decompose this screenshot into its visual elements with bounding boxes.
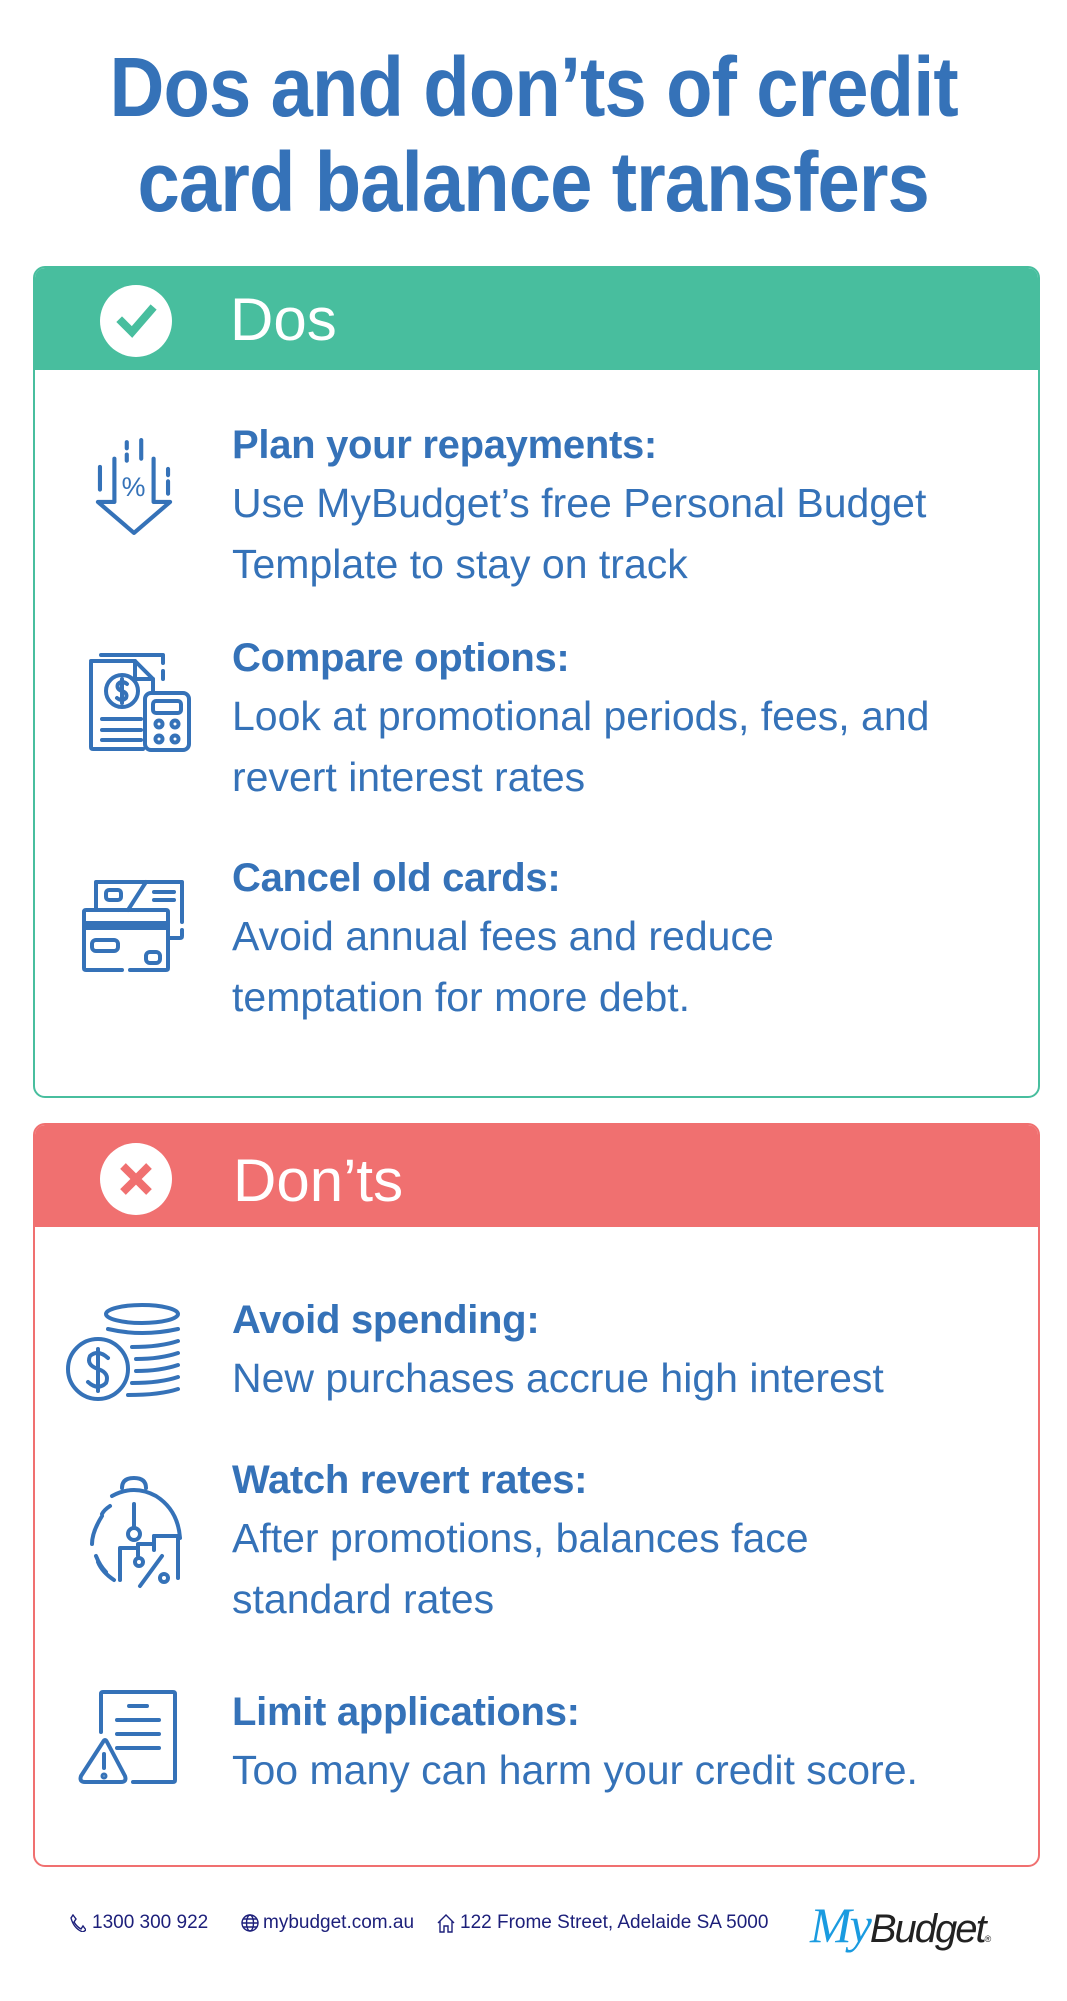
item: watch revert rates [232, 1458, 809, 1622]
icon: percent down arrow [96, 438, 172, 535]
item: compare options: Look at promotional periods, fees, and [232, 693, 929, 739]
phone number: 1300 300 922 [92, 1912, 208, 1933]
item: plan repayments: Plan your repayments: [232, 423, 657, 467]
icon: stopwatch percent [90, 1476, 182, 1588]
item: plan repayments [232, 423, 926, 587]
title: Dos and don’ts of credit [109, 40, 958, 134]
item: cancel old cards: Avoid annual fees and reduce [232, 913, 774, 959]
dos header [35, 268, 1038, 370]
icon: phone [70, 1914, 86, 1932]
icon: coins [66, 1303, 180, 1401]
item: compare options: revert interest rates [232, 754, 585, 800]
dos heading: Dos [230, 286, 337, 353]
item: compare options [232, 636, 929, 800]
item: plan repayments: Template to stay on track [232, 541, 688, 587]
title [109, 40, 958, 229]
address: 122 Frome Street, Adelaide SA 5000 [460, 1912, 768, 1933]
item: limit applications [232, 1690, 918, 1793]
icon: credit cards [82, 880, 184, 972]
icon: percent down arrow: % [122, 472, 145, 502]
panel: donts [33, 1123, 1040, 1867]
item: cancel old cards [232, 856, 774, 1020]
icon: house [438, 1914, 454, 1933]
icon: x circle [100, 1143, 172, 1215]
item: avoid spending [232, 1298, 884, 1401]
icon: check circle [100, 285, 172, 357]
title: card balance transfers [138, 135, 929, 229]
icon: document warning [78, 1690, 177, 1784]
icon: document calculator [89, 653, 191, 752]
footer [70, 1897, 992, 1953]
donts heading: Don’ts [233, 1147, 403, 1214]
item: cancel old cards: temptation for more debt. [232, 974, 690, 1020]
item: limit applications: Limit applications: [232, 1690, 580, 1734]
logo: MyBudget® [810, 1897, 991, 1953]
website: mybudget.com.au [263, 1912, 414, 1933]
item: avoid spending: New purchases accrue high interest [232, 1355, 884, 1401]
item: watch revert rates: Watch revert rates: [232, 1458, 587, 1502]
donts header [35, 1125, 1038, 1227]
panel: dos [33, 266, 1040, 1098]
item: watch revert rates: After promotions, balances face [232, 1515, 809, 1561]
item: limit applications: Too many can harm your credit score. [232, 1747, 918, 1793]
item: avoid spending: Avoid spending: [232, 1298, 539, 1342]
item: watch revert rates: standard rates [232, 1576, 494, 1622]
item: cancel old cards: Cancel old cards: [232, 856, 560, 900]
item: plan repayments: Use MyBudget’s free Personal Budget [232, 480, 926, 526]
icon: globe [241, 1914, 259, 1932]
item: compare options: Compare options: [232, 636, 569, 680]
